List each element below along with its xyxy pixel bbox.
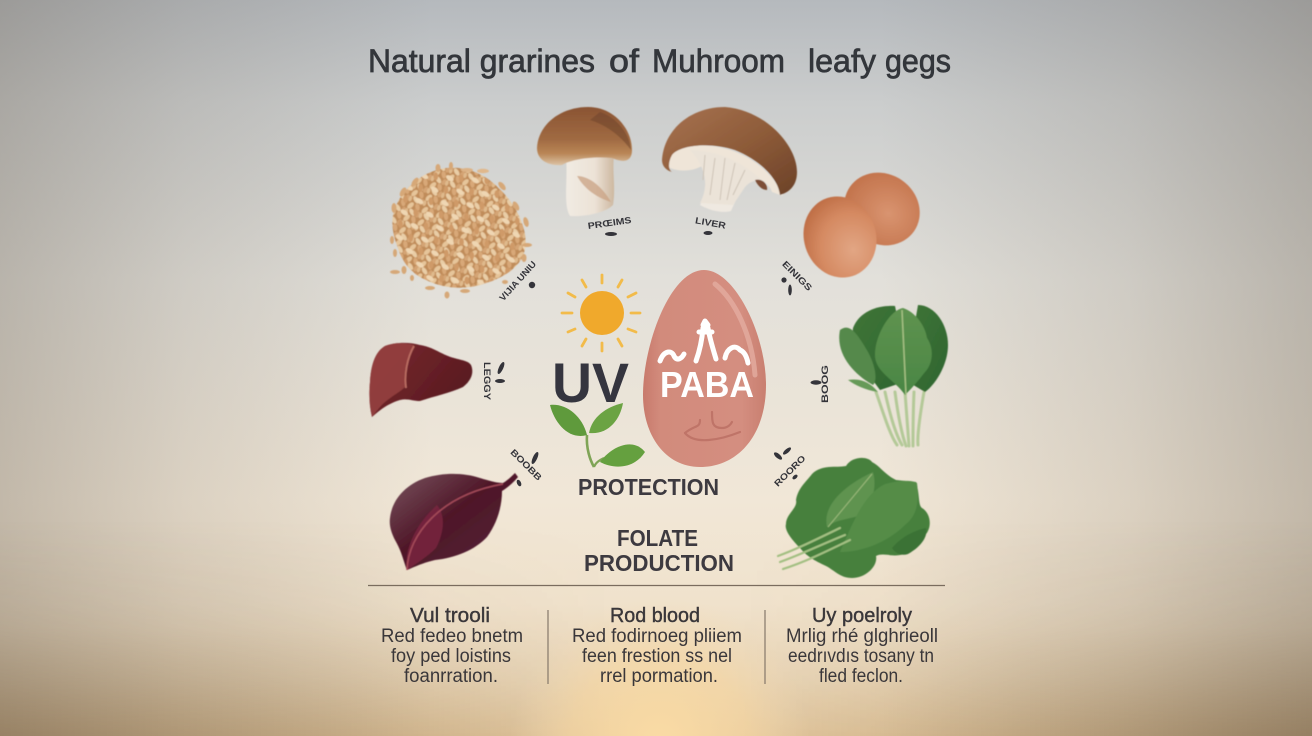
tiny labels bbox=[482, 215, 830, 489]
label: liver side bbox=[482, 361, 506, 400]
label: progims bbox=[587, 215, 632, 236]
label: liver: LIVER bbox=[694, 215, 727, 231]
title: Natural grarines bbox=[368, 43, 595, 79]
label: spinach bbox=[810, 365, 830, 403]
panel: PABA egg bbox=[643, 270, 766, 467]
label: eggs: EINIGS bbox=[780, 259, 814, 293]
label: grain: VIJIA UNIU bbox=[497, 259, 538, 303]
column: middle: Red fodirnoeg pliiem bbox=[572, 626, 742, 647]
label: liver bbox=[694, 215, 727, 235]
title bbox=[368, 43, 951, 79]
icon: beet leaf bbox=[390, 473, 518, 570]
label: progims: PRŒIMS bbox=[587, 215, 632, 231]
label: leaves bbox=[772, 446, 808, 489]
text: PABA: PABA bbox=[660, 364, 754, 405]
column: right: Mrlig rhé glghrieoll bbox=[786, 626, 938, 647]
label: leaves: ROORO bbox=[772, 453, 808, 489]
title: of bbox=[609, 43, 639, 79]
heading: folate production: PRODUCTION bbox=[584, 550, 734, 576]
heading: protection: PROTECTION bbox=[578, 474, 719, 500]
column: middle: feen frestion ss nel bbox=[582, 646, 732, 667]
label: beet: BOOBB bbox=[508, 447, 544, 483]
icon: large mushroom bbox=[662, 107, 797, 212]
title: gegs bbox=[885, 43, 951, 79]
icon: white squiggles bbox=[660, 321, 748, 363]
column: middle bbox=[572, 604, 742, 687]
label: spinach: BOOG bbox=[820, 365, 830, 403]
text: UV: UV bbox=[552, 351, 629, 414]
icon: eggs bbox=[793, 158, 934, 287]
icon: liver bbox=[369, 343, 472, 417]
column: left bbox=[381, 604, 523, 687]
title: leafy bbox=[808, 43, 876, 79]
column: right: eedrıvdıs tosany tn bbox=[788, 646, 934, 667]
column: right: Uy poelroly bbox=[812, 604, 913, 627]
label: beet bbox=[508, 447, 544, 487]
heading: folate production: FOLATE bbox=[617, 525, 698, 551]
icon: spinach leaves bbox=[778, 458, 930, 578]
title: Muhroom bbox=[652, 43, 785, 79]
column: left: Vul trooli bbox=[410, 604, 490, 627]
column: middle: rrel pormation. bbox=[600, 666, 718, 687]
icon: sun bbox=[562, 275, 640, 351]
heading: folate production bbox=[584, 525, 734, 576]
column: right bbox=[786, 604, 938, 687]
column: right: fled feclon. bbox=[819, 666, 903, 687]
icon: spinach bunch bbox=[839, 305, 948, 446]
icon: egg marks bbox=[685, 412, 740, 440]
column: middle: Rod blood bbox=[610, 604, 700, 627]
label: liver side: LEGGY bbox=[482, 362, 492, 400]
icon: grain pile bbox=[390, 162, 532, 298]
column: left: foanrration. bbox=[404, 666, 498, 687]
label: eggs bbox=[780, 259, 814, 296]
icon: sprout bbox=[550, 403, 645, 467]
icon: small mushroom bbox=[537, 107, 632, 216]
column: left: Red fedeo bnetm bbox=[381, 626, 523, 647]
column: left: foy ped loistins bbox=[391, 646, 511, 667]
